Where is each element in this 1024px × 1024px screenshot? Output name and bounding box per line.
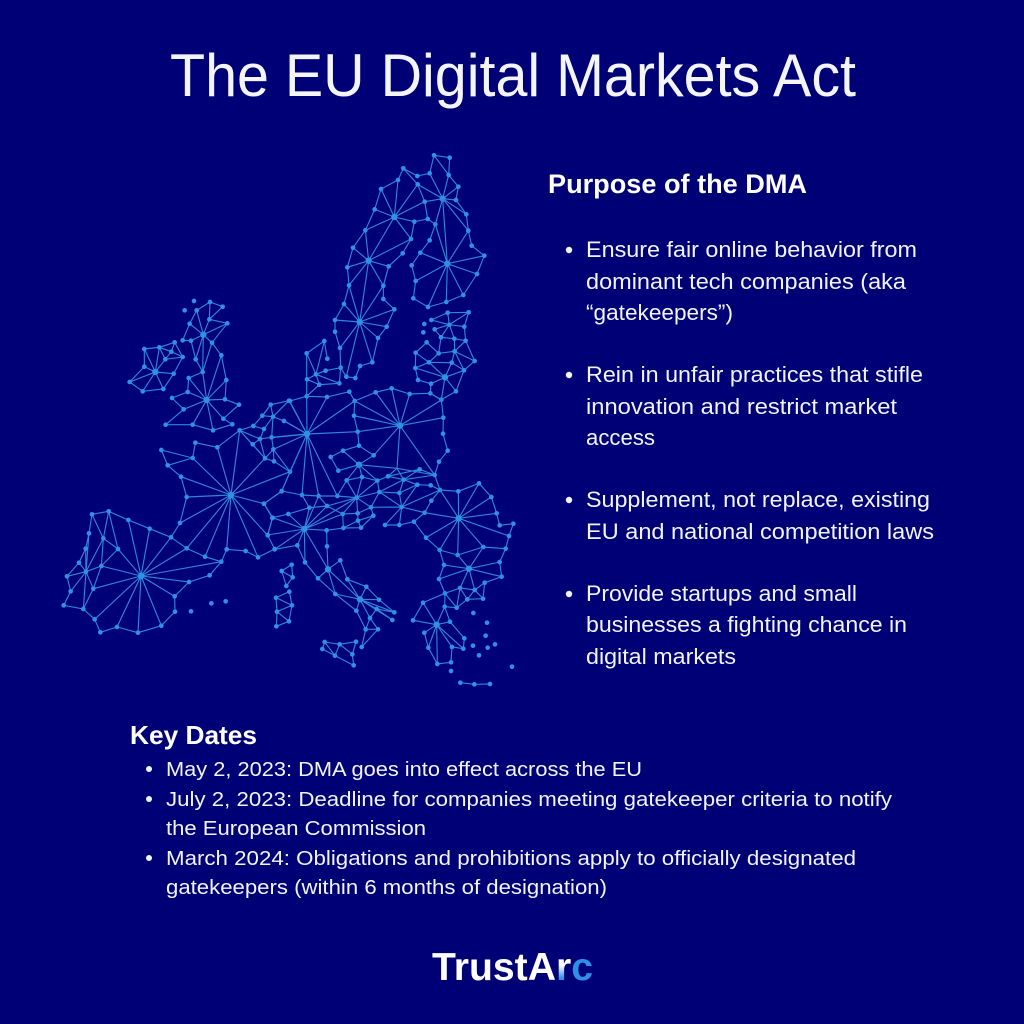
map region: Poland	[331, 388, 448, 475]
logo: TrustArc: TrustArc	[432, 946, 593, 989]
map region: Germany	[263, 392, 358, 496]
map region: Finland	[412, 199, 484, 307]
bullet: competition laws: Supplement, not replace, existing	[586, 487, 930, 512]
network map of Europe	[64, 155, 513, 684]
map region: Spain and Portugal	[64, 511, 226, 633]
bullet: unfair practices: innovation and restrict market	[586, 394, 897, 419]
bullet: startups	[566, 581, 907, 669]
bullet: startups: digital markets	[586, 644, 736, 669]
bullet: unfair practices	[566, 362, 923, 450]
bullet: unfair practices: Rein in unfair practices that stifle	[586, 362, 923, 387]
bullet: startups: businesses a fighting chance in	[586, 612, 907, 637]
map region: Baltics	[415, 312, 475, 400]
purpose list	[566, 237, 934, 669]
date: July 2, 2023	[146, 789, 892, 840]
heading: Key Dates: Key Dates	[130, 720, 257, 750]
map region: Benelux	[240, 401, 307, 472]
date: March 2024: March 2024: Obligations and prohibitions apply to officially designated	[166, 848, 856, 870]
map: western Europe	[64, 301, 307, 633]
map region: Central Europe	[264, 465, 440, 528]
map region: Bulgaria	[439, 547, 506, 608]
date: July 2, 2023: July 2, 2023: Deadline for companies meeting gatekeeper criteria to notify	[166, 789, 892, 811]
map region: United Kingdom	[166, 301, 239, 430]
map region: France	[161, 430, 290, 562]
map: central and southern Europe	[263, 388, 513, 684]
bullet: fair behavior: Ensure fair online behavior from	[586, 237, 917, 262]
title: The EU Digital Markets Act	[170, 42, 856, 109]
bullet: fair behavior	[566, 237, 917, 325]
map region: Romania	[414, 483, 513, 555]
heading: Purpose of the DMA: Purpose of the DMA	[548, 169, 807, 199]
date: May 2, 2023: May 2, 2023: DMA goes into effect across the EU	[166, 759, 642, 781]
map region: Sicily	[322, 642, 356, 665]
date: March 2024	[146, 848, 856, 899]
bullet: fair behavior: dominant tech companies (aka	[586, 269, 907, 294]
map region: Scandinavia	[335, 155, 458, 383]
date: July 2, 2023: the European Commission	[166, 818, 426, 840]
map region: Italy	[264, 496, 394, 647]
bullet: competition laws: EU and national competition laws	[586, 519, 934, 544]
map region: Ireland	[130, 342, 183, 391]
bullet: fair behavior: “gatekeepers”)	[586, 300, 733, 325]
map region: Greece	[413, 593, 512, 684]
bullet: unfair practices: access	[586, 425, 655, 450]
map: northern Europe	[290, 155, 484, 401]
date: March 2024: gatekeepers (within 6 months of designation)	[166, 877, 607, 899]
map region: Denmark	[290, 341, 341, 401]
map region: Corsica and Sardinia	[276, 565, 293, 626]
key dates list	[146, 759, 892, 899]
bullet: startups: Provide startups and small	[586, 581, 857, 606]
bullet: competition laws	[566, 487, 934, 544]
